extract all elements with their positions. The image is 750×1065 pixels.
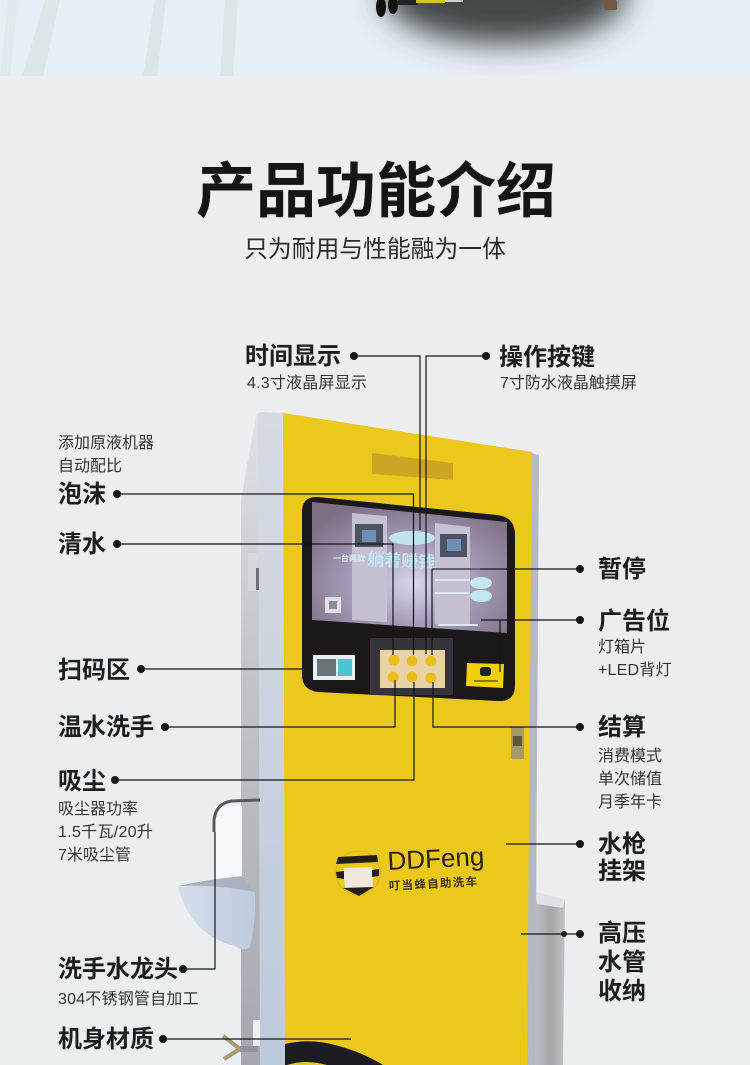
yellow sticker [466,663,504,688]
subtitle: 只为耐用与性能融为一体 [244,236,506,263]
callout: 结算 [433,682,662,811]
top photo strip [0,0,660,76]
callout: 机身材质: 机身材质 [58,1026,154,1053]
vehicle wheels [376,0,617,17]
callout: 时间显示 [245,343,420,530]
callout: 操作按键: 7寸防水液晶触摸屏 [500,374,637,392]
callout: 泡沫: 添加原液机器 [58,434,154,452]
callout: 扫码区: 扫码区 [58,657,130,684]
wing nut [223,1020,260,1059]
callout: 结算: 月季年卡 [598,793,662,811]
screen display: 一台两款 [333,553,365,563]
callout: 水枪挂架 [506,830,646,885]
callout: 时间显示: 4.3寸液晶屏显示 [247,374,367,392]
sink basin [178,876,255,949]
callout: 广告位 [481,607,672,679]
callout: 机身材质 [58,1026,351,1053]
machine illustration [178,412,567,1065]
callout: 泡沫: 泡沫 [58,481,106,508]
callout: 水枪挂架: 挂架 [598,858,646,885]
DDFeng logo: DDFeng [387,841,485,876]
callout: 洗手水龙头 [58,832,215,1008]
callout: 时间显示: 时间显示 [245,343,341,370]
coin slot [511,727,524,759]
callout: 高压水管收纳: 高压 [598,920,646,947]
callout: 吸尘 [58,682,414,864]
rear hose holder [530,892,567,1065]
callout: 清水 [58,531,393,655]
faucet pipe [214,800,260,832]
callout: 结算: 消费模式 [598,747,662,765]
callout: 温水洗手 [58,680,395,741]
screen bezel [302,497,515,701]
callout: 吸尘: 吸尘 [58,768,106,795]
QR code sign [313,655,355,680]
DDFeng logo: 叮当蜂自助洗车 [388,874,479,893]
callout: 操作按键: 操作按键 [499,344,595,371]
callout: 暂停: 暂停 [598,556,646,583]
callout: 吸尘: 1.5千瓦/20升 [58,823,153,841]
base wheel arc [285,1041,383,1065]
callout: 结算: 结算 [598,714,646,741]
callout: 高压水管收纳: 水管 [598,949,646,976]
callout: 洗手水龙头: 洗手水龙头 [58,956,178,983]
gap behind faucet [215,806,242,878]
title: 产品功能介绍 [196,158,556,225]
steel front band [258,412,285,1065]
callout: 暂停 [432,556,646,655]
callout: 洗手水龙头: 304不锈钢管自加工 [58,990,199,1008]
callout: 扫码区 [58,657,303,684]
callout: 吸尘: 吸尘器功率 [58,800,138,818]
screen display: 躺着赚钱 [367,549,436,573]
screen display [312,502,507,633]
callout: 广告位: +LED背灯 [598,661,672,679]
callout: 水枪挂架: 水枪 [598,830,646,858]
callout: 清水: 清水 [58,531,106,558]
callout: 高压水管收纳 [521,920,646,1005]
callout: 泡沫 [58,434,414,655]
callout: 温水洗手: 温水洗手 [58,714,154,741]
control keypad [370,638,453,695]
callout: 操作按键 [426,344,637,654]
callout: 高压水管收纳: 收纳 [598,978,646,1005]
callout: 吸尘: 7米吸尘管 [58,846,131,864]
callout: 广告位: 广告位 [598,607,670,635]
steel body side [241,413,262,1065]
yellow front panel [283,413,532,1065]
callout: 结算: 单次储值 [598,770,662,788]
speaker grille [372,453,453,480]
handle on the side [248,553,259,591]
callout: 广告位: 灯箱片 [598,638,646,656]
callout: 泡沫: 自动配比 [58,457,122,475]
DDFeng logo [336,841,485,896]
